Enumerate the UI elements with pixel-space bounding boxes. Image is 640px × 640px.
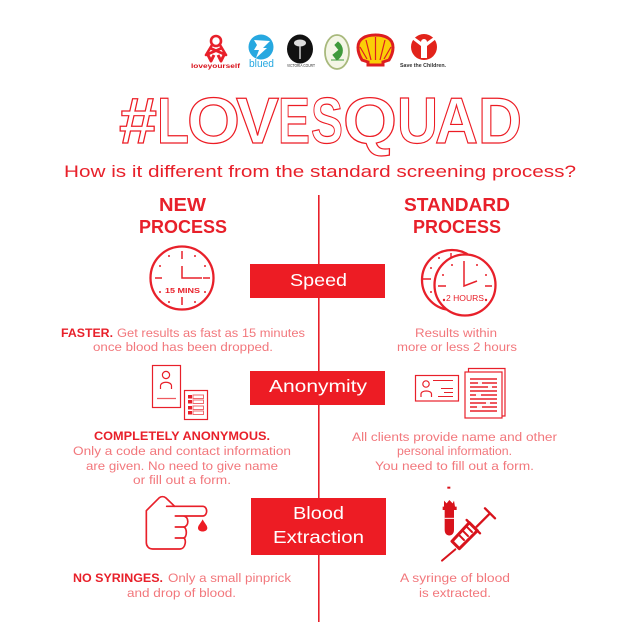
text: completely anonymous: are given. No need to give name bbox=[86, 459, 278, 473]
central divider line bbox=[318, 195, 320, 622]
title: V bbox=[236, 84, 279, 157]
icon: 2 hour clocks bbox=[422, 250, 496, 316]
text: no syringes: NO SYRINGES. bbox=[73, 571, 163, 585]
icon: finger and blood drop bbox=[146, 497, 207, 549]
heading: new process: NEW bbox=[159, 195, 206, 215]
title: # bbox=[119, 84, 157, 157]
logo: Victoria Court bbox=[287, 34, 315, 68]
text: a syringe of blood: is extracted. bbox=[419, 586, 491, 600]
text: all clients provide name: You need to fill out a form. bbox=[375, 459, 534, 473]
text: completely anonymous: or fill out a form. bbox=[133, 473, 231, 487]
title: O bbox=[187, 84, 240, 157]
label: speed bbox=[250, 264, 385, 298]
title: A bbox=[435, 84, 478, 157]
logo: loveyourself: loveyourself bbox=[191, 63, 241, 70]
icon: 15 minute clock: 15 MINS bbox=[165, 286, 200, 295]
logo: green seal bbox=[325, 35, 349, 69]
label: speed: Speed bbox=[290, 270, 347, 290]
logo: blued: blued bbox=[249, 58, 274, 70]
text: results within 2 hours: Results within bbox=[415, 326, 497, 340]
subtitle: How is it different from the standard screening process? bbox=[64, 162, 576, 181]
text: results within 2 hours: more or less 2 hours bbox=[397, 340, 517, 354]
logo: Shell bbox=[358, 35, 393, 65]
icon: id card and documents bbox=[416, 368, 505, 418]
logo: loveyourself bbox=[191, 36, 241, 70]
text: completely anonymous: Only a code and contact information bbox=[73, 444, 291, 458]
text: a syringe of blood: A syringe of blood bbox=[400, 571, 510, 585]
title: S bbox=[311, 84, 343, 157]
icon: 2 hour clocks: 2 HOURS bbox=[446, 294, 485, 303]
title: Q bbox=[343, 84, 397, 157]
label: blood extraction: Extraction bbox=[273, 527, 364, 547]
text: faster: FASTER. bbox=[61, 326, 113, 340]
title: E bbox=[278, 84, 310, 157]
text: no syringes: and drop of blood. bbox=[127, 586, 236, 600]
icon: test tube and syringe bbox=[442, 487, 495, 561]
icon: 15 minute clock bbox=[150, 246, 214, 310]
logo: Save the Children bbox=[400, 34, 446, 69]
logo: blued bbox=[248, 34, 274, 70]
text: completely anonymous: COMPLETELY ANONYMOUS. bbox=[94, 429, 270, 443]
label: anonymity bbox=[250, 371, 385, 405]
text: all clients provide name: All clients provide name and other bbox=[352, 430, 557, 444]
icon: anonymous id and form bbox=[152, 366, 208, 420]
label: blood extraction bbox=[251, 498, 386, 555]
label: blood extraction: Blood bbox=[293, 503, 344, 523]
title: D bbox=[478, 84, 522, 157]
heading: new process: PROCESS bbox=[139, 217, 227, 237]
heading: standard process: STANDARD bbox=[404, 195, 510, 215]
label: anonymity: Anonymity bbox=[269, 376, 367, 396]
text: all clients provide name: personal information. bbox=[397, 444, 512, 458]
text: no syringes: Only a small pinprick bbox=[168, 571, 292, 585]
title: U bbox=[397, 84, 438, 157]
title: L bbox=[157, 84, 189, 157]
logo: Save the Children: Save the Children. bbox=[400, 63, 446, 69]
heading: standard process: PROCESS bbox=[413, 217, 501, 237]
logo: Victoria Court: VICTORIA COURT bbox=[287, 63, 315, 68]
logo row bbox=[191, 34, 446, 70]
text: faster: once blood has been dropped. bbox=[93, 340, 273, 354]
text: faster: Get results as fast as 15 minutes bbox=[117, 326, 305, 340]
